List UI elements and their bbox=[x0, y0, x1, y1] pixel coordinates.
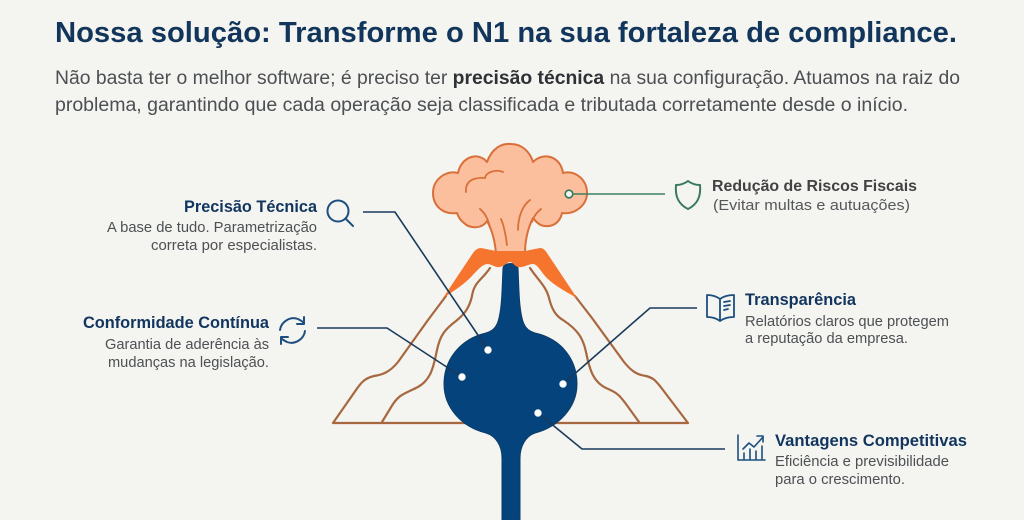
item: Vantagens Competitivas: Vantagens Competitivas bbox=[775, 432, 967, 450]
item: Conformidade Contínua: mudanças na legislação. bbox=[108, 355, 269, 371]
leader line: Redução de Riscos bbox=[569, 193, 665, 195]
intro text bbox=[55, 68, 960, 116]
title: Nossa solução: Transforme o N1 na sua fortaleza de compliance. bbox=[55, 17, 957, 49]
item: Precisão Técnica: correta por especialistas. bbox=[151, 238, 317, 254]
crater rim bbox=[443, 248, 577, 298]
item: Transparência: a reputação da empresa. bbox=[745, 331, 908, 347]
leader line: Transparência bbox=[563, 308, 697, 384]
magma conduit and chamber bbox=[444, 264, 577, 520]
icon: growth chart bbox=[738, 435, 765, 460]
volcano outline bbox=[333, 268, 688, 423]
item: Precisão Técnica bbox=[107, 198, 318, 254]
item: Redução de Riscos Fiscais: (Evitar multas e autuações) bbox=[713, 198, 910, 214]
item: Transparência: Transparência bbox=[745, 291, 857, 309]
item: Conformidade Contínua: Conformidade Contínua bbox=[83, 314, 270, 332]
volcano diagram bbox=[333, 144, 688, 520]
leader line: Precisão Técnica bbox=[363, 212, 488, 350]
cloud marker dot bbox=[565, 190, 573, 198]
icon: magnifier bbox=[328, 200, 353, 226]
item: Vantagens Competitivas: Eficiência e previsibilidade bbox=[775, 454, 949, 470]
item: Redução de Riscos Fiscais: Redução de Riscos Fiscais bbox=[712, 178, 917, 195]
item: Transparência: Relatórios claros que protegem bbox=[745, 314, 949, 330]
item: Precisão Técnica: Precisão Técnica bbox=[184, 198, 318, 216]
item: Conformidade Contínua bbox=[83, 314, 270, 371]
item: Conformidade Contínua: Garantia de aderência às bbox=[105, 337, 269, 353]
icon: shield bbox=[676, 181, 700, 209]
eruption cloud bbox=[433, 144, 587, 254]
leader line: Vantagens Competitivas bbox=[538, 413, 725, 449]
icon: open book bbox=[707, 295, 734, 321]
chamber marker dots bbox=[459, 347, 566, 416]
intro text: problema, garantindo que cada operação seja classificada e tributada corretamente desde o início. bbox=[55, 95, 908, 116]
intro text: Não basta ter o melhor software; é preciso ter precisão técnica na sua configuração. Atuamos na raiz do bbox=[55, 68, 960, 89]
item: Vantagens Competitivas bbox=[775, 432, 967, 488]
item: Transparência bbox=[745, 291, 949, 347]
item: Vantagens Competitivas: para o crescimento. bbox=[775, 472, 905, 488]
icon: refresh arrows bbox=[280, 317, 305, 344]
item: Precisão Técnica: A base de tudo. Parametrização bbox=[107, 220, 317, 236]
leader line: Conformidade Contínua bbox=[317, 328, 462, 377]
item: Redução de Riscos Fiscais bbox=[712, 178, 917, 214]
